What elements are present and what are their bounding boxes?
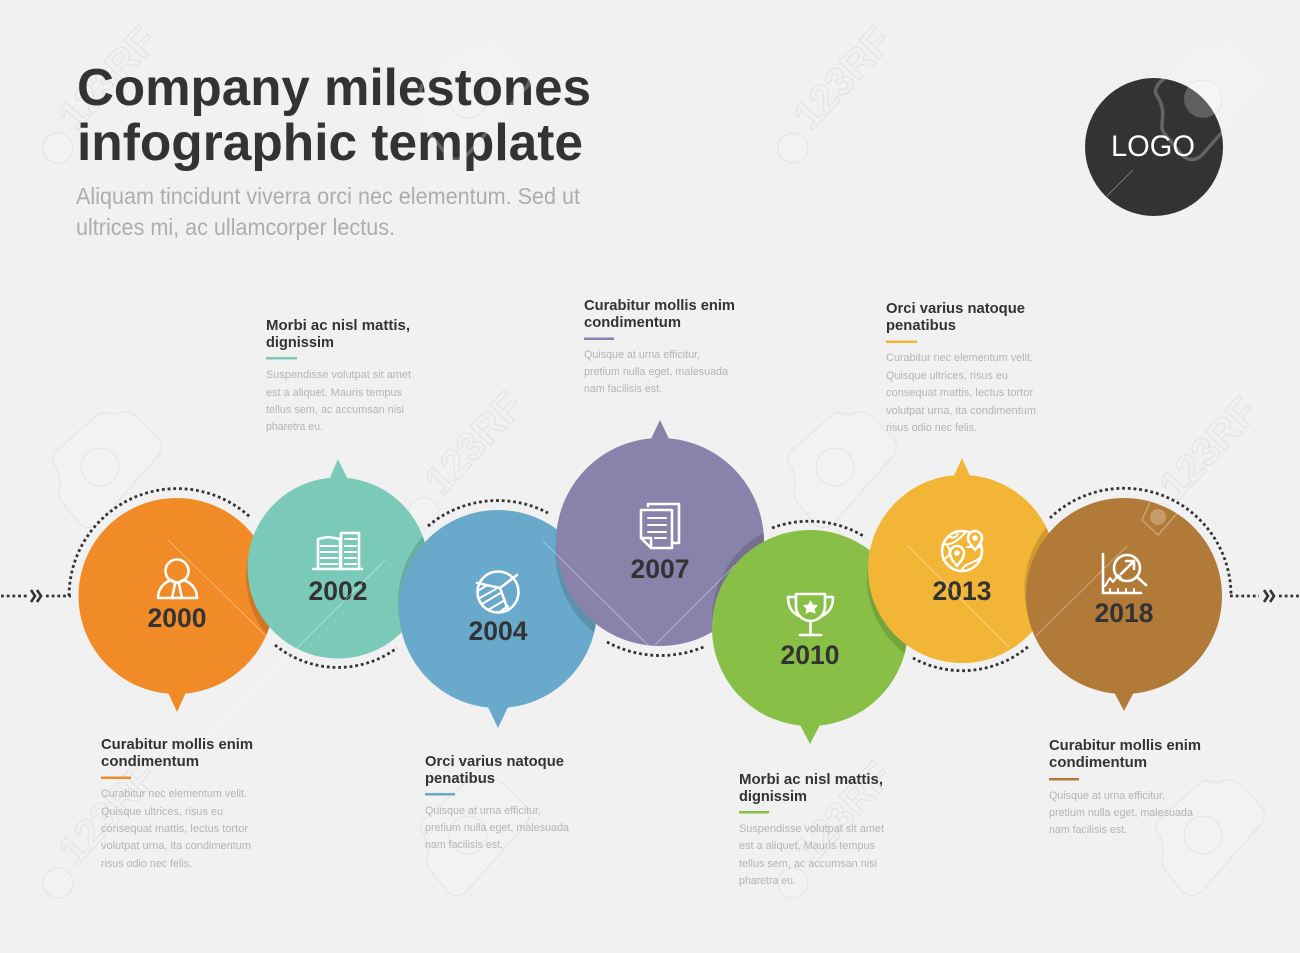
logo badge	[1085, 78, 1223, 216]
text block: 2010: Suspendisse volutpat sit amet	[739, 823, 884, 835]
text block: 2007: pretium nulla eget, malesuada	[584, 366, 729, 378]
subtitle	[76, 183, 581, 240]
text block: 2000: Curabitur mollis enim	[101, 737, 253, 753]
text block: 2010: tellus sem, ac accumsan nisi	[739, 858, 877, 870]
text block: 2013: Orci varius natoque	[886, 301, 1025, 317]
year 2007: 2007	[631, 554, 689, 584]
text block: 2013: risus odio nec felis.	[886, 422, 977, 434]
text block: 2013: penatibus	[886, 318, 956, 334]
year 2004: 2004	[469, 616, 528, 646]
title	[77, 58, 591, 171]
year 2002: 2002	[309, 576, 367, 606]
icon: businessman	[158, 560, 197, 598]
text block: 2000: Quisque ultrices, risus eu	[101, 806, 223, 818]
text block: 2010: Morbi ac nisl mattis,	[739, 772, 883, 788]
text block: 2002: tellus sem, ac accumsan nisi	[266, 404, 404, 416]
watermark pattern: 123RF	[50, 19, 166, 138]
text block: 2007: Quisque at urna efficitur,	[584, 349, 700, 361]
watermark overlay lines	[168, 43, 1264, 745]
text block: 2002: Suspendisse volutpat sit amet	[266, 369, 411, 381]
text block: 2000: risus odio nec felis.	[101, 858, 192, 870]
milestone bubble 2002	[246, 459, 428, 668]
subtitle: Aliquam tincidunt viverra orci nec elementum. Sed ut	[76, 183, 581, 209]
timeline end arrow	[1230, 590, 1300, 602]
text block: 2004	[425, 754, 570, 851]
text block: 2000: volutpat urna, ita condimentum	[101, 840, 251, 852]
text block: 2000	[101, 737, 253, 870]
icon: pie chart	[476, 572, 518, 616]
text block: 2010: pharetra eu.	[739, 875, 796, 887]
text block: 2004: pretium nulla eget, malesuada	[425, 822, 570, 834]
text block: 2018: Curabitur mollis enim	[1049, 738, 1201, 754]
year 2000: 2000	[148, 603, 206, 633]
dotted timeline arcs	[69, 488, 1231, 671]
text block: 2000: condimentum	[101, 754, 199, 770]
year 2013: 2013	[933, 576, 991, 606]
text block: 2010: est a aliquet. Mauris tempus	[739, 840, 875, 852]
text block: 2007: Curabitur mollis enim	[584, 298, 735, 314]
milestone bubble 2013	[867, 458, 1056, 672]
watermark pattern: 123RF	[785, 19, 901, 138]
text block: 2010	[739, 772, 884, 887]
text block: 2018: condimentum	[1049, 755, 1147, 771]
text block: 2002: pharetra eu.	[266, 421, 323, 433]
title: infographic template	[77, 113, 583, 171]
watermark pattern: 123RF	[1151, 389, 1267, 508]
text block: 2002	[266, 318, 411, 433]
text block: 2018: nam facilisis est.	[1049, 824, 1127, 836]
milestone bubble 2000	[78, 498, 274, 712]
subtitle: ultrices mi, ac ullamcorper lectus.	[76, 214, 395, 240]
text block: 2000: consequat mattis, lectus tortor	[101, 823, 248, 835]
text block: 2018: pretium nulla eget, malesuada	[1049, 807, 1194, 819]
text block: 2013: volutpat urna, ita condimentum	[886, 405, 1036, 417]
milestone bubble 2007	[556, 420, 764, 656]
icon: documents	[641, 504, 679, 548]
text block: 2007: nam facilisis est.	[584, 383, 662, 395]
text block: 2004: Quisque at urna efficitur,	[425, 805, 541, 817]
icon: office buildings	[313, 533, 362, 569]
text block: 2013: consequat mattis, lectus tortor	[886, 387, 1033, 399]
watermark pattern: 123RF	[785, 754, 901, 873]
text block: 2004: nam facilisis est.	[425, 839, 503, 851]
icon: chart with magnifier	[1103, 554, 1146, 593]
milestone bubble 2010	[712, 521, 908, 744]
watermark pattern: 123RF	[416, 384, 532, 503]
text block: 2018: Quisque at urna efficitur,	[1049, 790, 1165, 802]
title: Company milestones	[77, 58, 591, 116]
watermark pattern: 123RF	[50, 754, 166, 873]
year 2018: 2018	[1095, 598, 1153, 628]
logo badge: LOGO	[1111, 130, 1195, 163]
milestone bubble 2004	[398, 503, 597, 728]
text block: 2002: Morbi ac nisl mattis,	[266, 318, 410, 334]
text block: 2004: Orci varius natoque	[425, 754, 564, 770]
text block: 2013	[886, 301, 1036, 434]
text block: 2007	[584, 298, 735, 395]
text block: 2007: condimentum	[584, 315, 681, 331]
text block: 2000: Curabitur nec elementum velit.	[101, 788, 247, 800]
text block: 2013: Curabitur nec elementum velit.	[886, 352, 1033, 364]
year 2010: 2010	[781, 640, 839, 670]
text block: 2013: Quisque ultrices, risus eu	[886, 370, 1008, 382]
text block: 2002: dignissim	[266, 335, 334, 351]
text block: 2010: dignissim	[739, 789, 807, 805]
text block: 2004: penatibus	[425, 771, 495, 787]
text block: 2002: est a aliquet. Mauris tempus	[266, 387, 402, 399]
milestone bubble 2018	[1024, 491, 1222, 711]
timeline start arrow	[1, 590, 71, 602]
text block: 2018	[1049, 738, 1201, 836]
icon: globe with pins	[942, 531, 982, 571]
icon: trophy	[788, 594, 833, 635]
